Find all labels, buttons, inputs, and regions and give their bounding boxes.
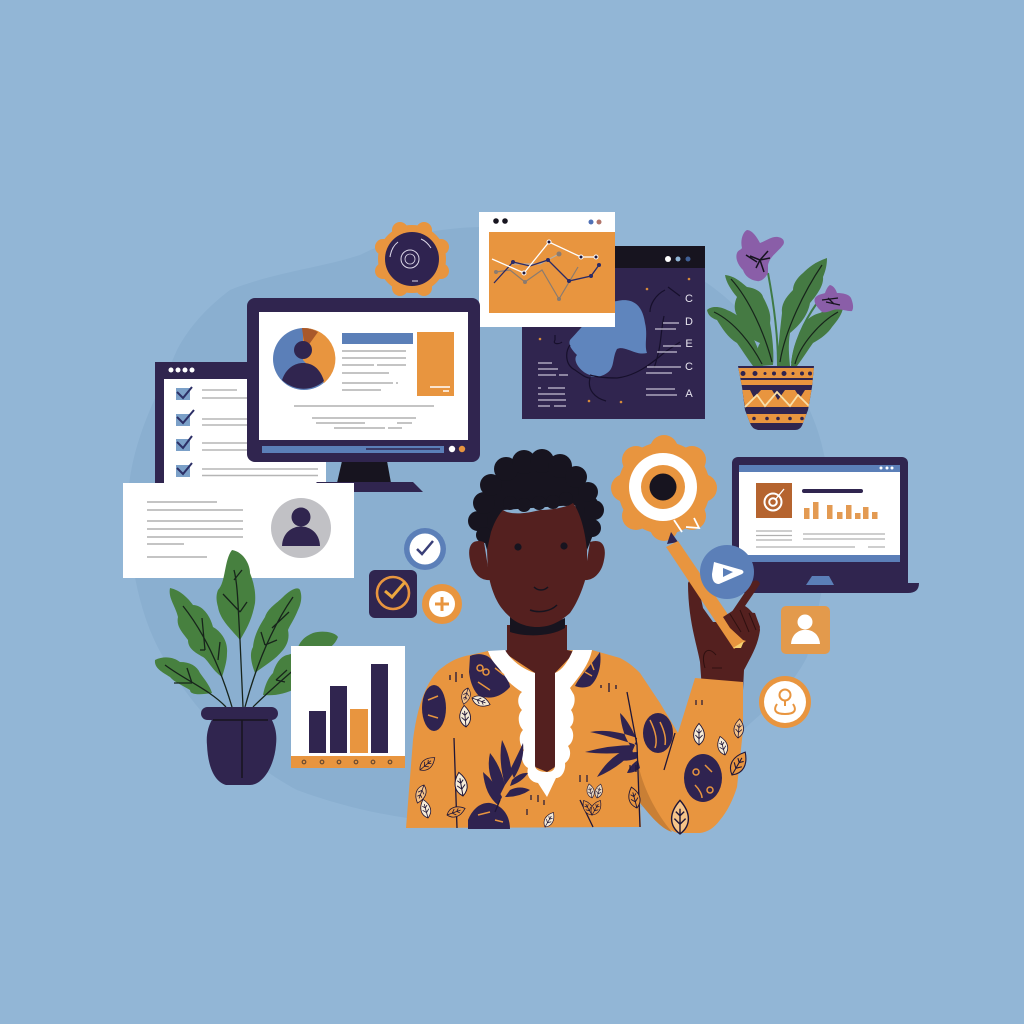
sleeve shadow bbox=[638, 763, 672, 832]
map labels: D bbox=[685, 316, 693, 328]
map labels: C bbox=[685, 293, 693, 305]
map labels: E bbox=[685, 338, 693, 350]
neck bbox=[503, 625, 575, 772]
hair bbox=[480, 455, 597, 550]
location user badge bbox=[759, 676, 811, 728]
checklist window bbox=[155, 362, 326, 484]
chart window bbox=[479, 212, 615, 327]
choker bbox=[510, 617, 565, 635]
target gear bbox=[611, 435, 717, 541]
map labels: C bbox=[685, 361, 693, 373]
map labels bbox=[685, 293, 693, 400]
map shape bbox=[569, 300, 647, 377]
pie chart with user bbox=[273, 328, 335, 390]
face bbox=[487, 503, 587, 627]
user tile bbox=[781, 606, 830, 654]
leafy plant in navy pot bbox=[155, 550, 338, 785]
shirt pattern bbox=[413, 652, 751, 834]
right fern bbox=[585, 713, 640, 777]
plant: purple flowers in patterned pot bbox=[707, 230, 853, 432]
gear icon: top bbox=[375, 222, 449, 296]
laptop bbox=[730, 457, 919, 593]
left fern bbox=[483, 740, 530, 805]
outlined leaves bbox=[459, 705, 471, 727]
dark map panel bbox=[522, 246, 705, 419]
hairline curls bbox=[503, 492, 573, 512]
hand bbox=[688, 580, 760, 690]
desktop monitor bbox=[247, 298, 480, 492]
bar chart card bbox=[291, 646, 405, 768]
person bbox=[406, 449, 760, 834]
profile document card bbox=[123, 483, 354, 578]
play button bbox=[700, 545, 754, 599]
fingers bbox=[703, 608, 760, 668]
vine lines bbox=[450, 672, 675, 828]
small icons: check, plus bbox=[369, 528, 462, 624]
ears bbox=[469, 541, 605, 580]
collar bbox=[488, 650, 592, 797]
background blob bbox=[128, 227, 830, 824]
shirt bbox=[406, 650, 743, 833]
patterned pot bbox=[738, 366, 814, 430]
map labels: A bbox=[685, 388, 693, 400]
pencil bbox=[666, 532, 746, 649]
